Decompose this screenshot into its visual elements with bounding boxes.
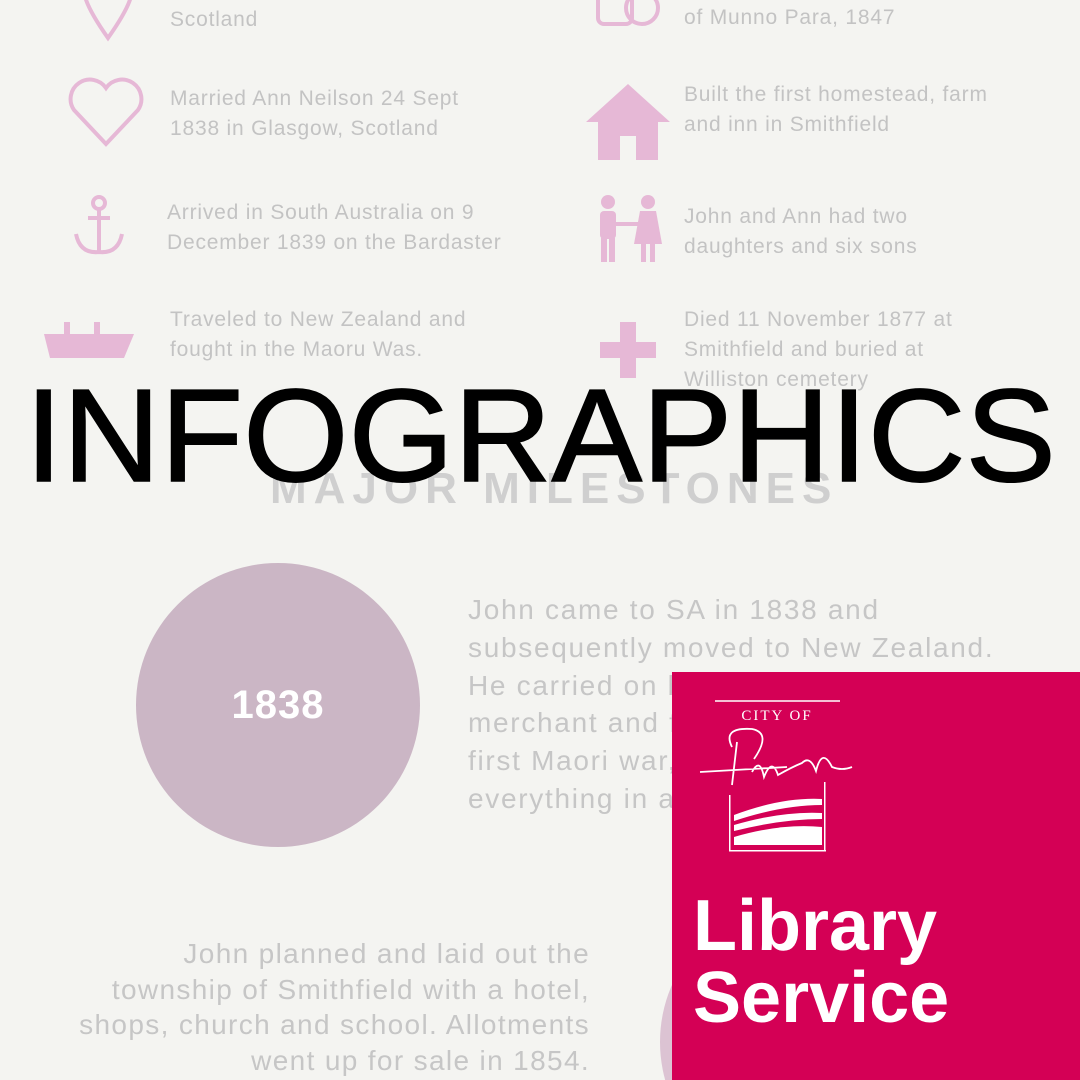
icon: house [586,84,670,160]
text: homestead: Built the first homestead, farm [684,83,988,106]
text: died [684,308,953,391]
text: homestead: and inn in Smithfield [684,113,890,136]
icon: coins [596,0,660,26]
text: married: Married Ann Neilson 24 Sept [170,87,459,110]
text: milestone smithfield [79,938,590,1076]
text: traveled: Traveled to New Zealand and [170,308,466,331]
text: library service [693,886,949,1038]
text: children: John and Ann had two [684,205,908,228]
text: married: 1838 in Glasgow, Scotland [170,117,439,140]
text: homestead [684,83,988,136]
text: milestone 1838: merchant and fought in the [468,707,845,738]
milestone circle partial [660,985,672,1080]
milestone circle 1838: 1838 [232,682,324,726]
logo: city of playford [700,700,852,852]
text: traveled [170,308,466,361]
text: arrived [167,201,502,254]
text: married [170,87,459,140]
icon: heart [68,78,144,147]
text: milestone smithfield: shops, church and school. Allotments [79,1009,590,1040]
icon: ship [44,322,134,358]
text: milestone 1838 [468,594,994,814]
text: children: daughters and six sons [684,235,918,258]
text: arrived: December 1839 on the Bardaster [167,231,502,254]
milestone circle 1838 [136,563,420,847]
icon: cross [600,322,656,378]
text: milestone smithfield: went up for sale in 1854. [251,1044,590,1076]
text: children [684,205,918,258]
text: milestone 1838: first Maori war, losing [468,745,770,776]
text: milestone 1838: John came to SA in 1838 and [468,594,880,625]
text: arrived: Arrived in South Australia on 9 [167,201,474,224]
text: milestone 1838: subsequently moved to New Zealand. [468,632,994,663]
text: library service: Service [693,958,949,1038]
text: library service: Library [693,886,937,966]
text: milestone smithfield: John planned and laid out the [183,938,590,969]
panel: library service logo [672,672,1080,1080]
text: died: Smithfield and buried at [684,338,924,361]
text: died: Williston cemetery [684,368,869,391]
text: milestone smithfield: township of Smithfield with a hotel, [112,974,590,1004]
text: munno para: of Munno Para, 1847 [684,6,895,29]
text: milestone 1838: everything in a fire. [468,783,740,814]
text: died: Died 11 November 1877 at [684,308,953,331]
title: infographics: INFOGRAPHICS [25,362,1056,509]
text: traveled: fought in the Maoru Was. [170,338,423,361]
heading: major milestones: MAJOR MILESTONES [270,464,838,513]
text: milestone 1838: He carried on business as a [468,670,861,701]
logo: city of playford: CITY OF [741,708,813,724]
icon: couple [600,195,662,262]
icon: anchor [74,195,124,254]
icon: location pin [84,0,132,42]
text: birth: Scotland [170,8,258,31]
